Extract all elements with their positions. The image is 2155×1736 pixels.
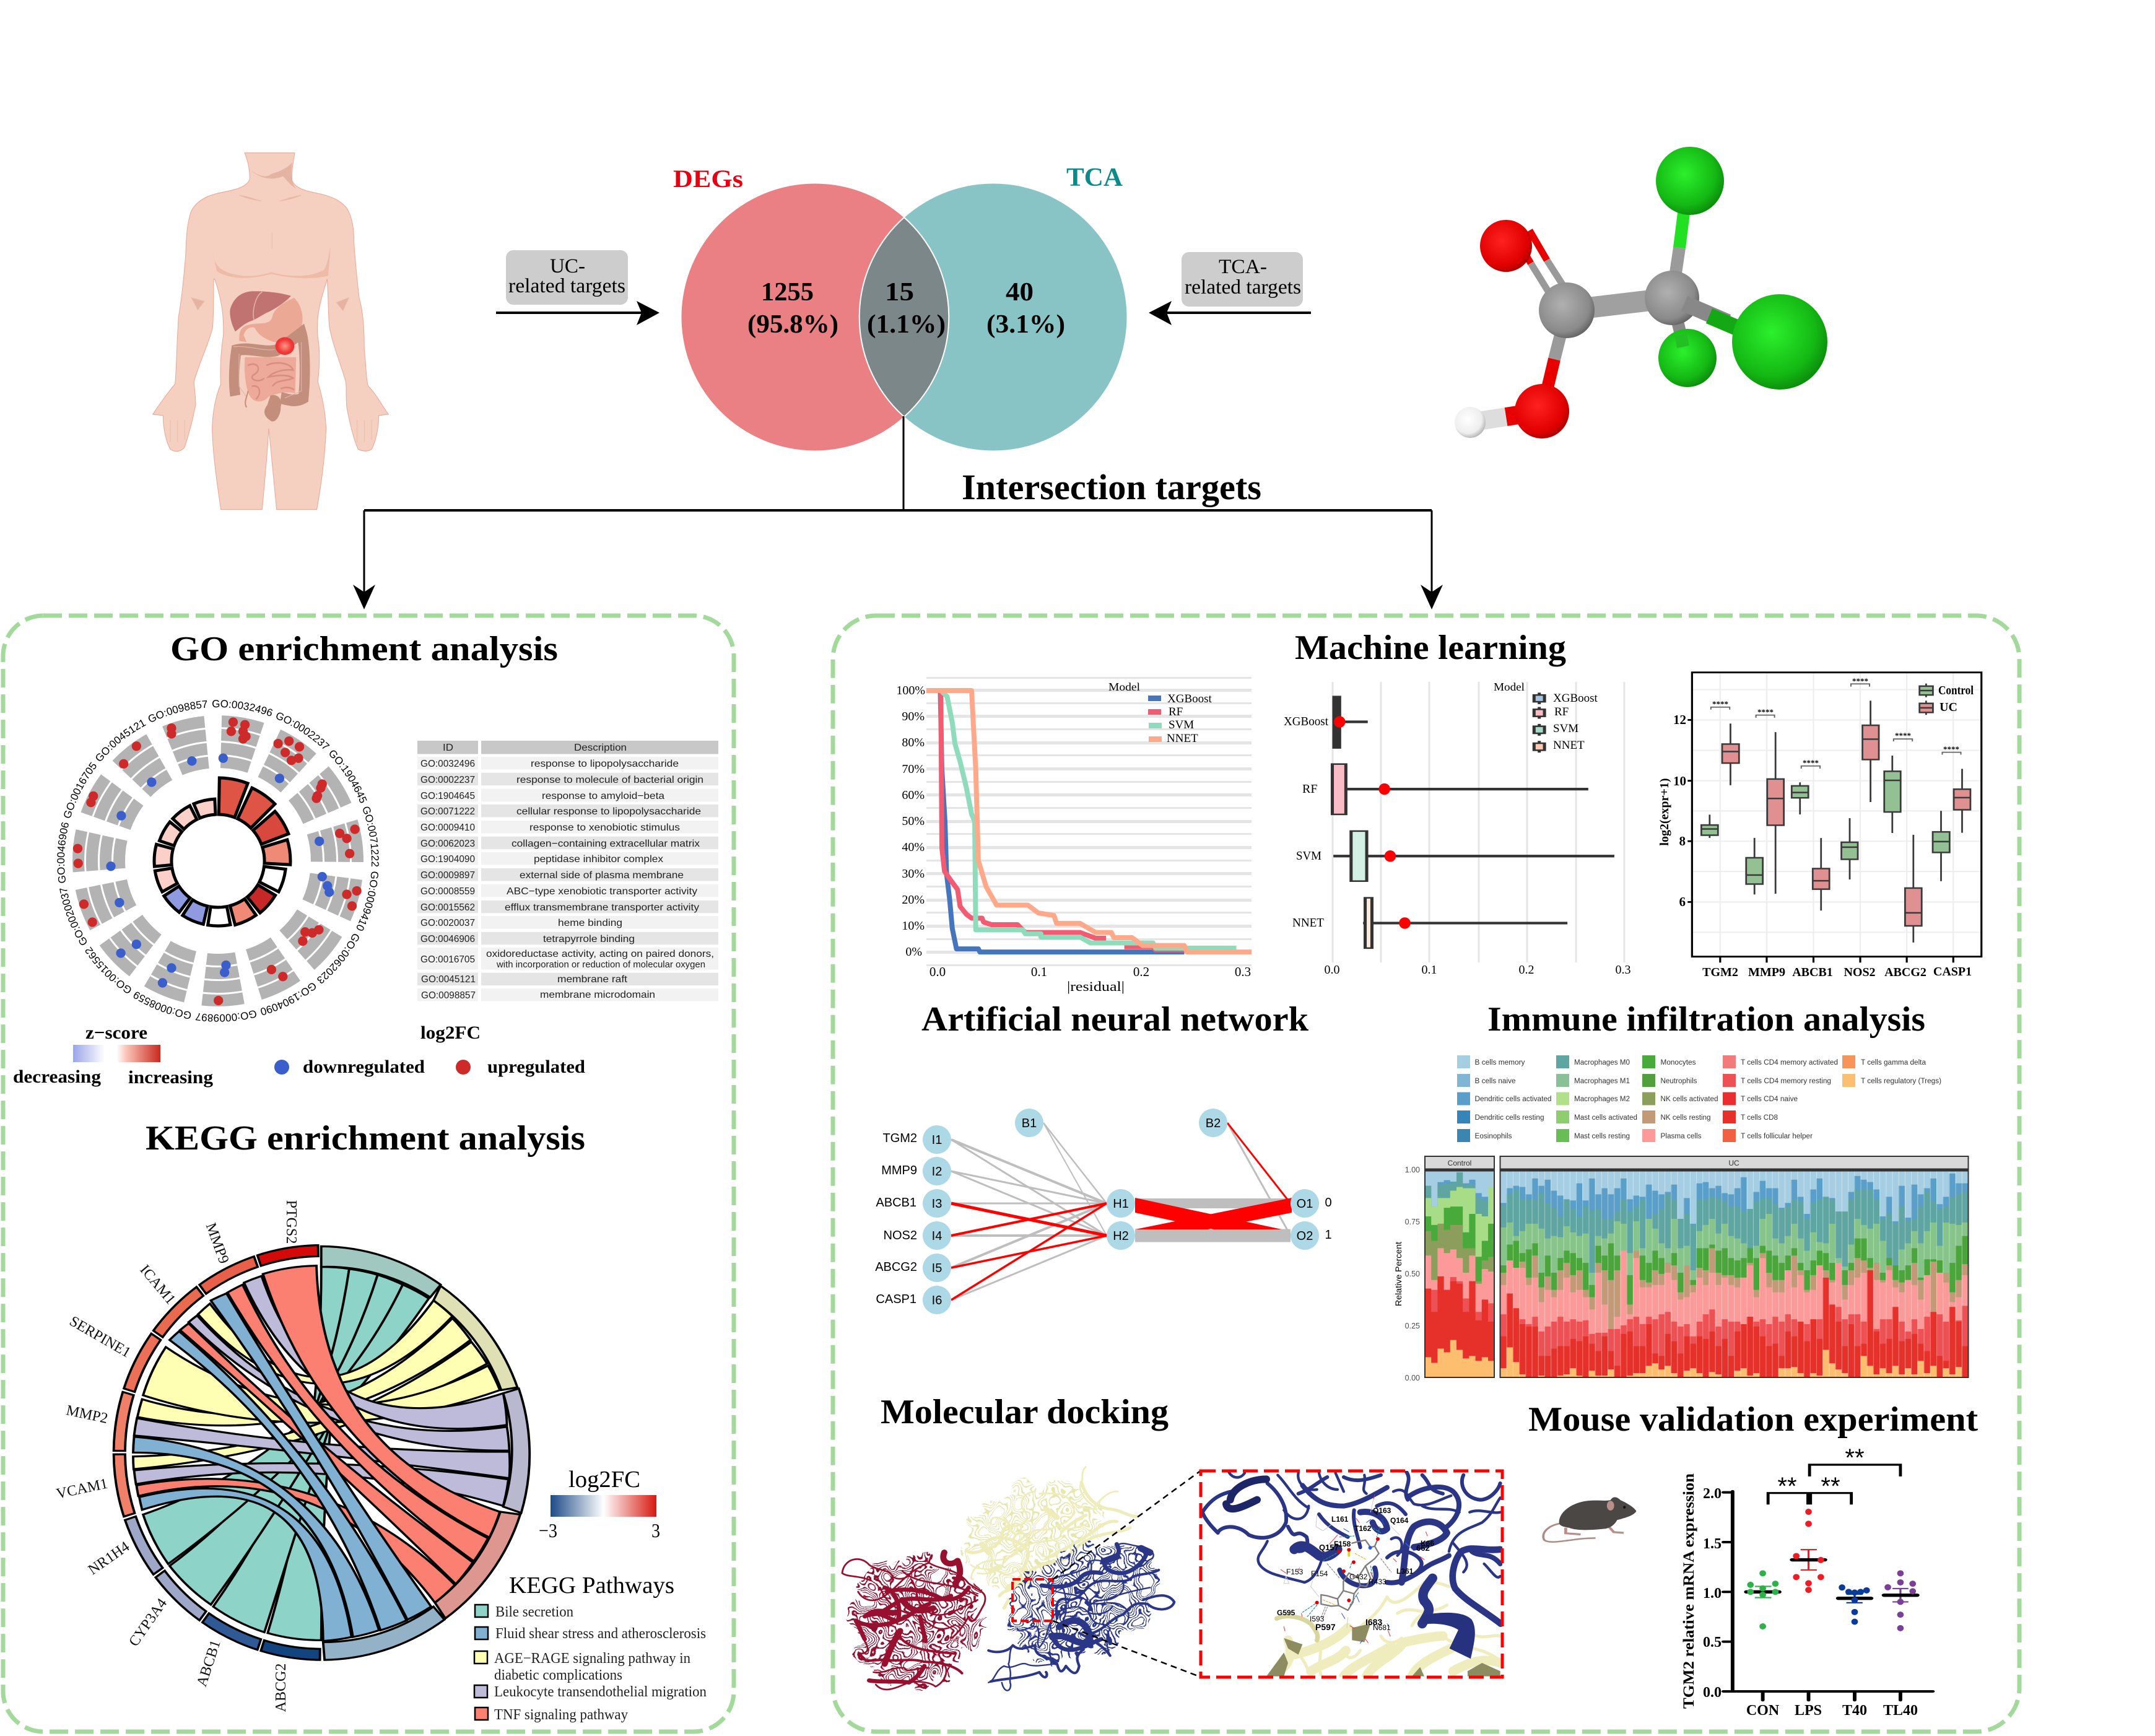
legend: immune cell types: Macrophages M2	[1574, 1096, 1630, 1103]
table: GO terms: GO:1904645	[420, 791, 475, 801]
legend: immune cell types: T cells regulatory (Tregs)	[1861, 1078, 1941, 1085]
chart: immune cell stacked bars: 1.00	[1405, 1166, 1420, 1174]
chart: gene expression box plot: 12	[1673, 712, 1686, 727]
chart: GO circle plot: GO:0016705	[64, 762, 97, 818]
legend: log2FC colour bar: 3	[651, 1519, 660, 1542]
illustration: docking close-up: F154	[1311, 1569, 1328, 1578]
chart: KEGG chord diagram: CYP3A4	[126, 1595, 170, 1649]
chart: residual box plot: 0.3	[1615, 963, 1631, 977]
legend: immune cell types: Dendritic cells activated	[1475, 1096, 1552, 1103]
heading: mouse validation experiment: Mouse validation experiment	[1528, 1400, 1978, 1439]
illustration: docking close-up: F153	[1286, 1568, 1304, 1576]
chart: neural network diagram: H2	[1113, 1229, 1129, 1243]
venn diagram: (3.1%)	[986, 310, 1065, 339]
chart: neural network diagram: I1	[932, 1133, 942, 1147]
chart: KEGG chord diagram: VCAM1	[55, 1476, 109, 1503]
chart: immune cell stacked bars	[1393, 1156, 1968, 1382]
chart: TGM2 mRNA dot plot: **	[1821, 1473, 1840, 1500]
chart: GO circle plot: GO:0098857	[149, 700, 207, 722]
chart: TGM2 mRNA dot plot: CON	[1746, 1703, 1780, 1719]
chart: residual box plot: SVM	[1553, 722, 1578, 735]
chart: GO circle plot: GO:0020037	[59, 888, 87, 945]
heading: machine learning: Machine learning	[1295, 629, 1566, 667]
venn diagram: (1.1%)	[867, 310, 946, 339]
legend: KEGG pathways: Fluid shear stress and atherosclerosis	[495, 1626, 706, 1642]
chart: TGM2 mRNA dot plot: 2.0	[1703, 1486, 1722, 1502]
table: GO terms: GO:1904090	[420, 854, 475, 865]
chart: immune cell stacked bars: 0.75	[1405, 1218, 1420, 1226]
chart: gene expression box plot: ****	[1852, 676, 1868, 686]
chart: TGM2 mRNA dot plot: **	[1845, 1444, 1865, 1472]
chart: residual cumulative distribution	[896, 677, 1252, 994]
chart: residual cumulative distribution: 0.0	[929, 964, 946, 979]
chart: residual cumulative distribution: RF	[1169, 705, 1183, 718]
table: GO terms: membrane microdomain	[540, 990, 655, 1000]
chart: neural network diagram	[875, 1109, 1332, 1314]
chart: residual cumulative distribution: 90%	[902, 710, 925, 723]
chart: residual cumulative distribution: 10%	[902, 919, 925, 933]
chart: neural network diagram: O1	[1297, 1197, 1313, 1211]
chart: GO circle plot: GO:0009410	[357, 872, 378, 931]
chart: residual box plot: XGBoost	[1284, 715, 1328, 728]
table: GO terms: GO:0008559	[420, 886, 475, 897]
table: GO terms: response to xenobiotic stimulus	[529, 822, 680, 833]
chart: TGM2 mRNA dot plot: LPS	[1795, 1703, 1822, 1719]
chart: immune cell stacked bars: 0.25	[1405, 1322, 1420, 1330]
chart: residual cumulative distribution: 80%	[902, 736, 925, 749]
chart: KEGG chord diagram: ICAM1	[136, 1262, 178, 1307]
chart: residual cumulative distribution: 20%	[902, 893, 925, 907]
chart: gene expression box plot: 10	[1673, 774, 1686, 788]
chart: TGM2 mRNA dot plot: TGM2 relative mRNA expression	[1681, 1473, 1697, 1709]
table: GO terms: peptidase inhibitor complex	[534, 854, 663, 865]
chart: KEGG chord diagram: NR1H4	[85, 1538, 133, 1578]
table: GO terms: response to molecule of bacterial origin	[516, 775, 703, 785]
chart: TGM2 mRNA dot plot: 1.5	[1703, 1536, 1722, 1552]
chart: neural network diagram: I6	[932, 1294, 942, 1307]
chart: gene expression box plot: TGM2	[1702, 966, 1738, 979]
chart: gene expression box plot: ABCG2	[1884, 966, 1926, 979]
chart: GO circle plot: GO:0015562	[85, 946, 131, 993]
chart: TGM2 mRNA dot plot: T40	[1842, 1703, 1867, 1719]
table: GO terms: oxidoreductase activity, acting on paired donors,	[486, 949, 714, 959]
table: GO terms	[417, 741, 718, 1001]
chart: GO circle plot: GO:0009897	[196, 1011, 256, 1022]
icon: trichloroacetic acid molecule	[1455, 147, 1827, 438]
chart: residual cumulative distribution: 0.3	[1235, 964, 1251, 979]
heading: GO enrichment analysis: GO enrichment analysis	[170, 630, 558, 668]
chart: neural network diagram: 0	[1325, 1196, 1332, 1210]
chart: residual box plot: Model	[1494, 681, 1525, 693]
venn diagram: 40	[1006, 278, 1034, 307]
table: GO terms: GO:0045121	[421, 974, 476, 985]
heading: immune infiltration analysis: Immune infiltration analysis	[1487, 1000, 1925, 1039]
legend: z-score	[13, 1023, 213, 1088]
chart: residual box plot: 0.1	[1422, 963, 1437, 977]
chart: residual box plot: NNET	[1553, 739, 1585, 752]
legend: log2FC direction	[274, 1023, 585, 1077]
legend: log2FC colour bar: log2FC	[568, 1467, 640, 1493]
chart: residual cumulative distribution: 0.1	[1031, 964, 1047, 979]
illustration: docking close-up: G595	[1277, 1608, 1295, 1617]
stacked bars: control group	[1425, 1171, 1494, 1377]
heading: artificial neural network: Artificial neural network	[921, 1000, 1309, 1039]
legend: KEGG pathways: diabetic complications	[494, 1667, 622, 1683]
table: GO terms: GO:0016705	[420, 954, 475, 965]
legend: log2FC direction: log2FC	[420, 1023, 481, 1043]
heading: molecular docking: Molecular docking	[881, 1393, 1169, 1431]
chart: neural network diagram: MMP9	[881, 1164, 917, 1177]
chart: gene expression box plot: NOS2	[1844, 966, 1876, 979]
panel: machine learning and validation	[833, 616, 2019, 1732]
illustration: docking close-up	[1201, 1471, 1502, 1677]
chart: residual box plot: NNET	[1292, 916, 1324, 930]
chart: GO circle plot: GO:0062023	[317, 934, 359, 984]
chart: GO circle plot: GO:0032496	[212, 700, 272, 716]
chart: residual cumulative distribution: 70%	[902, 762, 925, 776]
chart: KEGG chord diagram: MMP2	[64, 1402, 109, 1427]
venn diagram	[673, 164, 1127, 451]
table: GO terms: collagen−containing extracellular matrix	[512, 839, 700, 849]
table: GO terms: GO:0020037	[420, 918, 475, 928]
table: GO terms: GO:0071222	[420, 806, 475, 817]
chart: neural network diagram: ABCB1	[876, 1196, 916, 1210]
chart: neural network diagram: TGM2	[882, 1132, 917, 1145]
chart: residual cumulative distribution: XGBoost	[1167, 692, 1212, 705]
chart: immune cell stacked bars: Control	[1448, 1159, 1471, 1167]
chart: gene expression box plot: 8	[1679, 834, 1686, 848]
protein: dark red chain	[842, 1553, 985, 1690]
chart: residual box plot: 0.0	[1324, 963, 1340, 977]
venn diagram: DEGs	[673, 165, 743, 193]
table: GO terms: external side of plasma membrane	[520, 870, 684, 881]
legend: log2FC direction: downregulated	[303, 1057, 425, 1077]
illustration: docking close-up: L161	[1331, 1515, 1349, 1524]
panel: GO and KEGG enrichment	[1, 613, 736, 1734]
illustration: docking close-up: L361	[1396, 1567, 1414, 1576]
chart: gene expression box plot: Control	[1938, 684, 1974, 697]
chart: KEGG chord diagram: MMP9	[202, 1221, 232, 1266]
chart: neural network diagram: H1	[1113, 1197, 1129, 1211]
illustration: docking close-up: K66	[1421, 1539, 1434, 1548]
table: GO terms: GO:0062023	[420, 839, 475, 849]
chart: TGM2 mRNA dot plot: 1.0	[1703, 1586, 1722, 1602]
legend: KEGG pathways: TNF signaling pathway	[494, 1707, 628, 1723]
chart: residual box plot: RF	[1302, 782, 1317, 796]
table: GO terms: ID	[443, 743, 453, 753]
legend: immune cell types: Mast cells resting	[1574, 1133, 1630, 1140]
chart: immune cell stacked bars: UC	[1728, 1159, 1739, 1167]
chart: neural network diagram: ABCG2	[875, 1260, 917, 1274]
illustration: docking close-up: N681	[1373, 1623, 1391, 1632]
legend: immune cell types: B cells memory	[1475, 1059, 1525, 1066]
table: GO terms: GO:0002237	[420, 775, 475, 785]
chart: KEGG chord diagram: ABCB1	[194, 1638, 224, 1689]
venn diagram: 1255	[761, 278, 814, 307]
chart: immune cell stacked bars: 0.00	[1405, 1374, 1420, 1382]
chart: GO circle plot: GO:1904645	[329, 751, 367, 803]
chart: neural network diagram: I4	[932, 1229, 942, 1243]
legend: immune cell types: Mast cells activated	[1574, 1114, 1637, 1122]
chart: TGM2 mRNA dot plot: **	[1777, 1473, 1797, 1500]
table: GO terms: response to lipopolysaccharide	[531, 759, 679, 769]
legend: immune cell types: T cells CD4 memory resting	[1741, 1078, 1831, 1085]
chart: TGM2 mRNA dot plot: TL40	[1883, 1703, 1918, 1719]
chart: gene expression box plot: ****	[1803, 758, 1819, 767]
icon: human body with digestive organs	[153, 153, 388, 510]
illustration: docking close-up: P597	[1315, 1622, 1336, 1632]
chart: GO circle plot	[57, 700, 379, 1022]
chart: residual cumulative distribution: SVM	[1169, 718, 1194, 731]
legend: immune cell types: B cells naive	[1475, 1078, 1516, 1085]
chart: GO circle plot: GO:0071222	[363, 806, 379, 866]
illustration: docking close-up: R433	[1369, 1577, 1387, 1586]
chart: gene expression box plot	[1658, 673, 1982, 979]
illustration: docking close-up: I593	[1310, 1615, 1325, 1623]
legend: immune cell types: Neutrophils	[1661, 1078, 1697, 1085]
legend: immune cell types	[1457, 1055, 1941, 1142]
chart: GO circle plot: GO:0002237	[276, 712, 329, 749]
chart: residual cumulative distribution: Model	[1108, 681, 1140, 693]
illustration: docking close-up: T162	[1354, 1524, 1372, 1533]
chart: residual cumulative distribution: 100%	[896, 684, 925, 697]
chart: KEGG chord diagram: PTGS2	[283, 1200, 299, 1244]
table: GO terms: GO:0046906	[420, 934, 475, 944]
legend: KEGG pathways: KEGG Pathways	[509, 1572, 674, 1599]
chart: residual cumulative distribution: 50%	[902, 814, 925, 828]
table: GO terms: response to amyloid−beta	[542, 791, 664, 801]
chart: neural network diagram: 1	[1325, 1228, 1332, 1242]
chart: KEGG chord diagram	[55, 1200, 529, 1712]
legend: immune cell types: T cells gamma delta	[1861, 1059, 1926, 1066]
protein: blue chain	[988, 1515, 1180, 1691]
chart: residual box plot: RF	[1554, 705, 1569, 718]
legend: immune cell types: Eosinophils	[1475, 1133, 1512, 1140]
chart: neural network diagram: B1	[1022, 1117, 1037, 1130]
legend: immune cell types: Dendritic cells resting	[1475, 1114, 1544, 1122]
chart: gene expression box plot: log2(expr+1)	[1658, 778, 1671, 846]
legend: immune cell types: T cells follicular helper	[1741, 1133, 1813, 1140]
chart: neural network diagram: CASP1	[876, 1293, 916, 1306]
UC related targets label: UC-	[550, 255, 585, 277]
legend: z-score: increasing	[128, 1067, 213, 1088]
chart: gene expression box plot: ****	[1943, 744, 1959, 754]
connector tree with two arrows	[353, 416, 1443, 609]
chart: residual cumulative distribution: 0.2	[1133, 964, 1149, 979]
legend: immune cell types: T cells CD4 naive	[1741, 1096, 1798, 1103]
intersection lens	[860, 217, 949, 417]
legend: immune cell types: Plasma cells	[1661, 1133, 1702, 1140]
table: GO terms: ABC−type xenobiotic transporter activity	[507, 886, 697, 897]
chart: neural network diagram: I2	[932, 1165, 942, 1179]
table: GO terms: GO:0009897	[420, 870, 475, 881]
heading: intersection targets: Intersection targets	[962, 467, 1261, 507]
TCA related targets label: related targets	[1185, 276, 1301, 299]
dashed zoom lines	[1053, 1472, 1199, 1677]
venn diagram: 15	[885, 278, 914, 307]
chart: gene expression box plot: ****	[1895, 731, 1911, 740]
arrow: UC targets to venn	[496, 301, 660, 325]
chart: residual cumulative distribution: 40%	[902, 840, 925, 854]
table: GO terms: cellular response to lipopolysaccharide	[516, 806, 701, 817]
chart: gene expression box plot: ****	[1757, 707, 1774, 717]
chart: neural network diagram: O2	[1297, 1229, 1313, 1243]
legend: KEGG pathways: Leukocyte transendothelial migration	[494, 1684, 707, 1700]
legend: log2FC colour bar: −3	[539, 1519, 557, 1542]
legend: z-score: decreasing	[13, 1066, 101, 1087]
illustration: docking close-up: Q164	[1390, 1516, 1409, 1525]
illustration: protein complex overview	[842, 1459, 1180, 1691]
table: GO terms: efflux transmembrane transporter activity	[505, 902, 699, 913]
TCA related targets label: TCA-	[1219, 256, 1267, 278]
illustration: docking close-up: F158	[1334, 1540, 1351, 1548]
chart: GO circle plot: GO:0045121	[96, 720, 146, 761]
legend: KEGG pathways: Bile secretion	[495, 1604, 573, 1620]
chart: KEGG chord diagram: ABCG2	[273, 1664, 289, 1712]
chart: residual cumulative distribution: NNET	[1167, 732, 1198, 745]
stacked bars: UC group	[1500, 1171, 1968, 1377]
chart: gene expression box plot: ABCB1	[1792, 966, 1833, 979]
legend: KEGG pathways: AGE−RAGE signaling pathway in	[494, 1651, 690, 1667]
chart: immune cell stacked bars: 0.50	[1405, 1270, 1420, 1278]
chart: neural network diagram: I5	[932, 1262, 942, 1275]
chart: gene expression box plot: MMP9	[1748, 966, 1785, 979]
legend: immune cell types: T cells CD8	[1741, 1114, 1778, 1122]
chart: GO circle plot: GO:0046906	[57, 822, 69, 883]
arrow: TCA targets to venn	[1149, 301, 1311, 325]
table: GO terms: heme binding	[558, 918, 622, 928]
legend: KEGG pathways	[474, 1572, 707, 1723]
chart: gene expression box plot: CASP1	[1933, 965, 1972, 979]
table: GO terms: GO:0015562	[420, 902, 475, 913]
table: GO terms: Description	[574, 743, 627, 753]
chart: residual box plot: 0.2	[1518, 963, 1535, 977]
illustration: docking close-up: G432	[1349, 1572, 1368, 1581]
legend: log2FC direction: upregulated	[487, 1057, 585, 1077]
chart: GO circle plot: GO:0008559	[134, 992, 191, 1019]
chart: gene expression box plot: UC	[1939, 700, 1957, 714]
chart: residual cumulative distribution: |residual|	[1067, 979, 1125, 994]
illustration: docking close-up: 662	[1416, 1543, 1430, 1553]
chart: neural network diagram: NOS2	[884, 1229, 917, 1242]
table: GO terms: GO:0098857	[421, 990, 476, 1001]
table: GO terms: with incorporation or reduction of molecular oxygen	[496, 959, 705, 970]
legend: immune cell types: NK cells resting	[1661, 1114, 1710, 1122]
chart: gene expression box plot: 6	[1679, 894, 1686, 909]
legend: immune cell types: Monocytes	[1661, 1059, 1696, 1066]
chart: residual box plot: SVM	[1296, 849, 1321, 863]
chart: TGM2 mRNA dot plot: 0.5	[1703, 1634, 1722, 1651]
table: GO terms: membrane raft	[557, 974, 628, 985]
venn diagram: TCA	[1066, 164, 1123, 192]
table: GO terms: GO:0009410	[420, 822, 475, 833]
legend: immune cell types: T cells CD4 memory activated	[1741, 1059, 1838, 1066]
illustration: docking close-up: Q157	[1319, 1543, 1339, 1552]
chart: residual cumulative distribution: 60%	[902, 788, 925, 802]
UC related targets label: related targets	[508, 275, 625, 297]
TCA related targets label	[1182, 252, 1303, 307]
UC related targets label	[506, 250, 628, 305]
illustration: docking close-up: Q163	[1373, 1506, 1391, 1515]
legend: z-score: z−score	[85, 1023, 147, 1043]
zoom box on docking site	[1012, 1579, 1053, 1621]
chart: GO circle plot: GO:1904090	[261, 983, 316, 1015]
legend: immune cell types: Macrophages M1	[1574, 1078, 1630, 1085]
chart: residual box plot	[1284, 681, 1631, 977]
table: GO terms: tetrapyrrole binding	[543, 934, 635, 944]
legend: immune cell types: Macrophages M0	[1574, 1059, 1630, 1066]
legend: immune cell types: NK cells activated	[1661, 1096, 1718, 1103]
illustration: docking close-up: I683	[1365, 1617, 1382, 1627]
heading: KEGG enrichment analysis: KEGG enrichment analysis	[146, 1119, 585, 1158]
icon: mouse	[1543, 1497, 1636, 1542]
chart: gene expression box plot: ****	[1712, 699, 1728, 709]
chart: KEGG chord diagram: SERPINE1	[67, 1313, 133, 1361]
chart: neural network diagram: I3	[932, 1197, 942, 1211]
chart: residual cumulative distribution: 0%	[905, 945, 922, 959]
table: GO terms: GO:0032496	[420, 759, 475, 769]
chart: immune cell stacked bars: Relative Percent	[1393, 1242, 1403, 1306]
chart: residual box plot: XGBoost	[1553, 692, 1598, 705]
chart: neural network diagram: B2	[1206, 1117, 1221, 1130]
chart: residual cumulative distribution: 30%	[902, 867, 925, 881]
protein: pale yellow chain	[948, 1459, 1137, 1608]
chart: TGM2 mRNA dot plot: 0.0	[1703, 1685, 1722, 1701]
legend: log2FC colour bar	[539, 1467, 660, 1542]
venn diagram: (95.8%)	[747, 310, 838, 339]
chart: TGM2 mRNA dot plot	[1681, 1444, 1933, 1719]
